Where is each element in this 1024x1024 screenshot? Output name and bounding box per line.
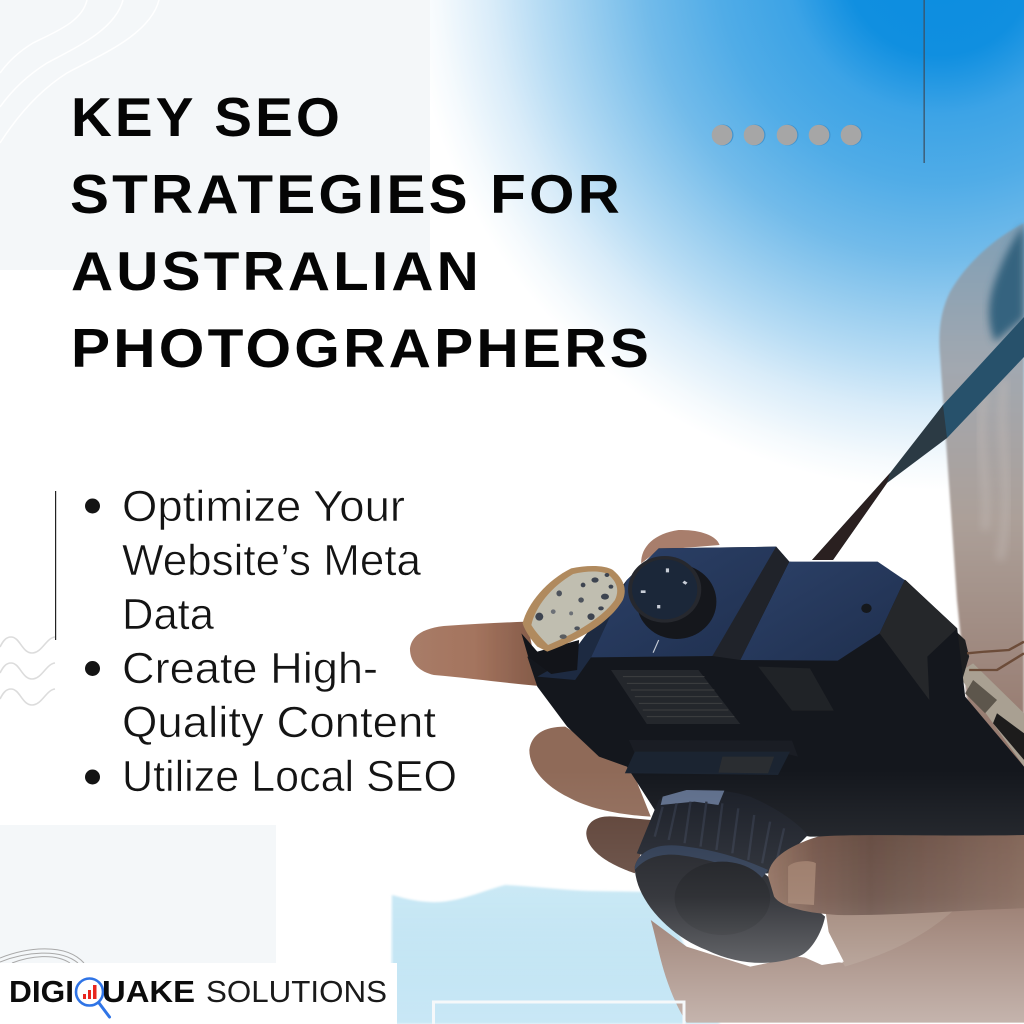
textured knob (523, 566, 625, 652)
camera top plate right (740, 562, 905, 661)
viewfinder screw (861, 604, 872, 613)
camera body (527, 547, 1024, 837)
right side face (880, 580, 957, 700)
photo: hands holding a camera (392, 223, 1024, 1024)
white gap under lens (799, 925, 844, 965)
logo: Digiquake Solutions (0, 963, 397, 1024)
title: AUSTRALIAN (71, 240, 482, 302)
thumb (768, 835, 1024, 915)
camera back edge and metal clip (929, 625, 1024, 767)
row of five dots (712, 124, 862, 146)
low hills in background (392, 885, 720, 1024)
blue radial glow (400, 0, 1024, 500)
middle finger (529, 727, 651, 817)
title: STRATEGIES FOR (70, 163, 623, 225)
item 1: Optimize Your (122, 482, 405, 531)
dial (628, 556, 716, 639)
title (70, 86, 652, 379)
pointing finger (410, 622, 539, 686)
vertical rule top right (924, 0, 925, 163)
ring finger (586, 816, 651, 873)
item 3: Utilize Local SEO (122, 752, 457, 801)
title: PHOTOGRAPHERS (71, 317, 652, 379)
item 2: Quality Content (122, 698, 436, 747)
vertical rule beside list (55, 491, 56, 640)
wave lines (0, 637, 55, 705)
camera strap (812, 317, 1024, 560)
side window (758, 667, 834, 711)
lens ribbed barrel (637, 790, 808, 877)
lens front (635, 845, 825, 963)
dial index mark (653, 640, 659, 653)
finger behind camera (641, 530, 720, 563)
item 2: Create High- (122, 644, 378, 693)
blue strip at left of top plate (537, 580, 627, 680)
arm (939, 223, 1024, 780)
item 1: Data (122, 590, 215, 639)
white fade over lower photo (392, 770, 1024, 1024)
decorative contour lines top-left (0, 0, 159, 143)
magnifier Q icon (76, 978, 110, 1017)
cap base (521, 633, 579, 674)
flash window (611, 670, 740, 724)
title: KEY SEO (71, 86, 343, 148)
divider between plates (712, 547, 789, 660)
logo: Digiquake Solutions: UAKE (102, 974, 195, 1009)
logo: Digiquake Solutions: DIGI (9, 974, 74, 1009)
camera top plate left (591, 547, 789, 657)
panel: top-left pale block (0, 0, 430, 270)
item 1 (85, 482, 422, 639)
contour swirl above logo (0, 949, 84, 963)
slider bar (625, 740, 798, 775)
item 2 (85, 644, 436, 747)
panel: lower-left pale block (0, 825, 276, 1024)
bullet list (85, 482, 457, 801)
thumb nail (788, 861, 816, 905)
finger pad below the lens (826, 907, 957, 967)
outlined frame at bottom (434, 1002, 684, 1024)
logo: Digiquake Solutions: SOLUTIONS (206, 974, 387, 1009)
item 1: Website’s Meta (122, 536, 422, 585)
palm (651, 867, 1024, 1023)
